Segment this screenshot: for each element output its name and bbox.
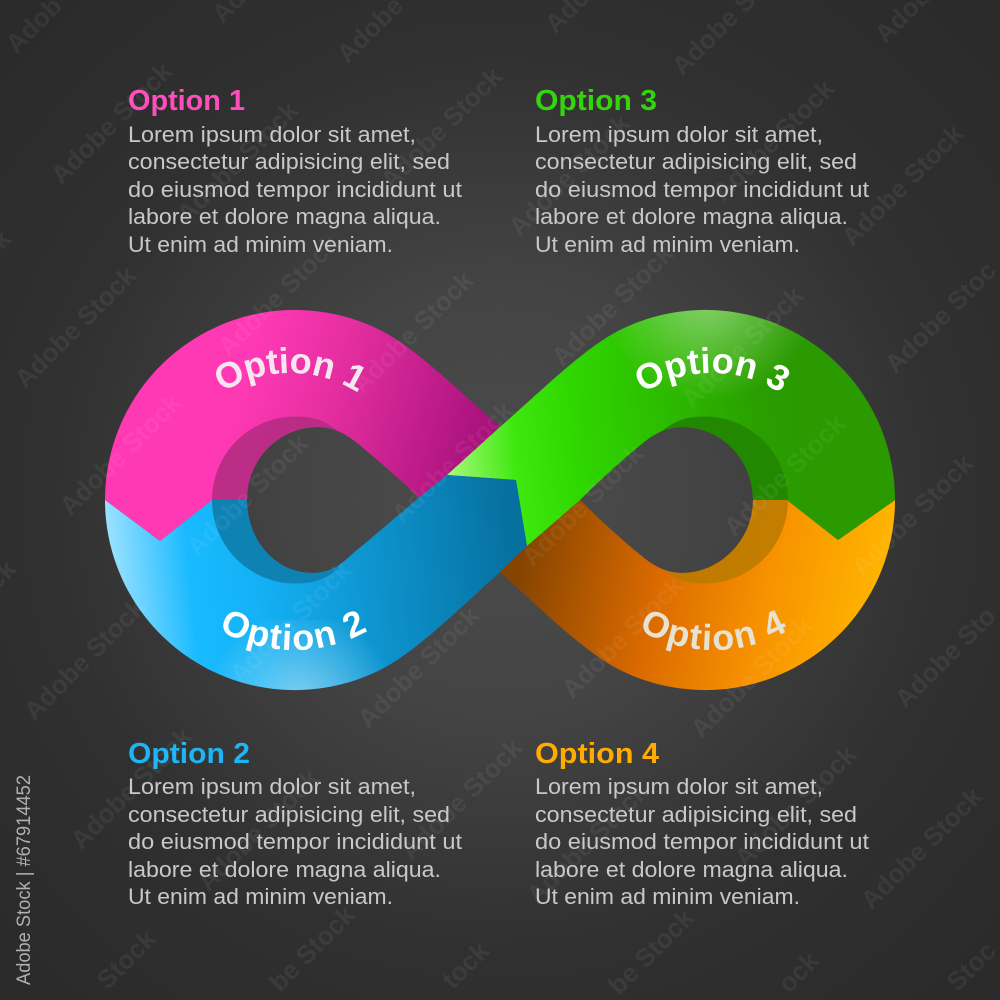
stock id side label: Adobe Stock | #67914452: [14, 775, 35, 985]
watermarks: Adobe Stock: [191, 763, 325, 897]
text block: option 2: Ut enim ad minim veniam.: [128, 884, 393, 909]
text block: option 4: do eiusmod tempor incididunt ut: [535, 829, 870, 854]
watermarks: Adobe Stoc: [879, 255, 1000, 379]
watermarks: Adobe Stock: [53, 387, 187, 521]
watermarks: Adobe Stock: [706, 73, 840, 207]
text block: option 1: labore et dolore magna aliqua.: [128, 204, 441, 229]
watermarks: ock: [772, 945, 825, 998]
text block: option 1: do eiusmod tempor incididunt ut: [128, 177, 463, 202]
watermarks: Adobe Stock: [675, 280, 809, 414]
text block: option 2: [128, 738, 463, 909]
text block: option 4: labore et dolore magna aliqua.: [535, 857, 848, 882]
segment: option 3 green: [447, 310, 895, 546]
watermarks: Adobe Stock: [64, 721, 198, 855]
watermarks: Adobe Stock: [545, 238, 679, 372]
text block: option 3: labore et dolore magna aliqua.: [535, 204, 848, 229]
watermarks: Adobe Stock: [555, 570, 689, 704]
text block: option 1: Ut enim ad minim veniam.: [128, 232, 393, 257]
text block: option 2: consectetur adipisicing elit, sed: [128, 802, 450, 827]
segment: option 2 blue: [105, 475, 527, 690]
watermarks: Adobe Stock: [374, 61, 508, 195]
watermarks: be Stock: [263, 899, 361, 997]
watermarks: Adobe Stock: [502, 108, 636, 242]
label: Option 2 on ribbon: Option 2: [223, 611, 367, 652]
watermarks: Adobe Stock: [170, 95, 304, 229]
watermarks: Adobe Stock: [44, 56, 178, 190]
text block: option 1: Option 1: [128, 85, 245, 117]
segment: option 4 orange: [500, 500, 895, 690]
watermarks: Adobe Stock: [845, 448, 979, 582]
text block: option 2: do eiusmod tempor incididunt ut: [128, 829, 463, 854]
watermarks: Stock: [90, 923, 162, 995]
watermarks: Adobe Stock: [8, 260, 142, 394]
text block: option 3: Ut enim ad minim veniam.: [535, 232, 800, 257]
text block: option 2: Option 2: [128, 738, 250, 770]
text block: option 1: consectetur adipisicing elit, sed: [128, 149, 450, 174]
watermarks: Adobe Stock: [728, 739, 862, 873]
text block: option 4: [535, 738, 870, 909]
watermarks: Adobe Stock: [351, 600, 485, 734]
text block: option 2: labore et dolore magna aliqua.: [128, 857, 441, 882]
watermarks: Adobe Stock: [385, 395, 519, 529]
watermarks: be Stock: [602, 902, 700, 1000]
watermarks: Adobe Stock: [394, 732, 528, 866]
text block: option 2: Lorem ipsum dolor sit amet,: [128, 774, 416, 799]
watermarks: Adobe Stock: [520, 776, 654, 910]
text block: option 4: consectetur adipisicing elit, sed: [535, 802, 857, 827]
infinity diagram: [105, 310, 895, 690]
text block: option 1: [128, 85, 463, 257]
label: Option 4 on ribbon: Option 4: [643, 610, 786, 652]
watermarks: Adobe Stock: [211, 228, 345, 362]
watermarks: tock: [436, 935, 495, 995]
label: Option 1 on ribbon: Option 1: [216, 347, 364, 392]
text block: option 1: Lorem ipsum dolor sit amet,: [128, 122, 416, 147]
watermarks: Adobe Stock: [17, 592, 151, 726]
text block: option 3: Lorem ipsum dolor sit amet,: [535, 122, 823, 147]
text block: option 4: Ut enim ad minim veniam.: [535, 884, 800, 909]
label: Option 3 on ribbon: Option 3: [636, 347, 790, 390]
text block: option 4: Lorem ipsum dolor sit amet,: [535, 774, 823, 799]
watermarks: Adobe Stock: [717, 408, 851, 542]
text block: option 4: Option 4: [535, 738, 659, 770]
text block: option 3: consectetur adipisicing elit, sed: [535, 149, 857, 174]
watermarks: Adobe Stock: [854, 781, 988, 915]
watermarks: Adobe Stock: [835, 118, 969, 252]
text block: option 3: [535, 85, 870, 257]
watermarks: Adobe Sto: [889, 601, 1000, 714]
watermarks: Adobe Stock: [180, 428, 314, 562]
watermarks: Adobe Stock: [684, 610, 818, 744]
text block: option 3: do eiusmod tempor incididunt ut: [535, 177, 870, 202]
watermarks: Adobe Stock: [515, 438, 649, 572]
watermarks: Stoc: [941, 936, 1000, 997]
watermarks: Adobe Stock: [223, 555, 357, 689]
watermarks: Adobe Stock: [345, 265, 479, 399]
text block: option 3: Option 3: [535, 85, 657, 117]
segment: option 1 pink: [105, 310, 500, 541]
